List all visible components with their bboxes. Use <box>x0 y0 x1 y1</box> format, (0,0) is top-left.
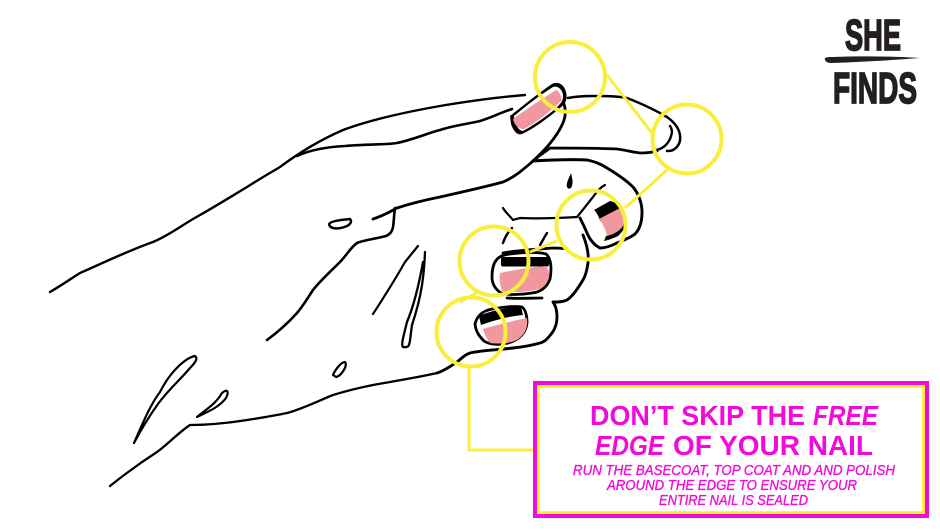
callout heading <box>590 400 879 461</box>
callout body text <box>573 462 895 509</box>
ring finger contour <box>437 235 588 373</box>
lower arm contour <box>110 373 437 486</box>
callout body text: RUN THE BASECOAT, TOP COAT AND AND POLISH <box>573 462 895 479</box>
logo: She Finds <box>825 11 920 113</box>
callout body text: ENTIRE NAIL IS SEALED <box>659 492 808 509</box>
upper arm and index finger contour <box>50 95 525 292</box>
nail: little finger <box>475 307 527 344</box>
callout box <box>535 383 927 516</box>
small wrist marks <box>329 219 351 228</box>
callout body text: AROUND THE EDGE TO ENSURE YOUR <box>606 477 857 494</box>
nail: ring finger <box>492 252 551 294</box>
callout connectors <box>460 75 667 450</box>
middle knuckle contour <box>533 160 642 248</box>
ring finger top edge <box>503 248 566 253</box>
illustration: hand outline <box>50 95 680 486</box>
icon: tear-shaped knuckle mark <box>567 173 573 189</box>
nail: middle finger <box>594 201 626 241</box>
callout heading: DON’T SKIP THE <box>590 400 805 431</box>
wrist bone outline <box>134 356 196 443</box>
finger creases <box>503 228 512 243</box>
thumb nail edge <box>656 126 672 150</box>
callout heading: EDGE <box>595 430 665 461</box>
highlight circles <box>436 42 722 366</box>
thumb top <box>568 96 680 151</box>
callout heading: FREE <box>813 400 879 431</box>
wrist notch and palm line <box>267 208 395 340</box>
callout heading: OF YOUR NAIL <box>673 430 873 461</box>
knuckle ridge <box>503 185 605 220</box>
lower index finger crease <box>297 109 512 156</box>
logo: She Finds: SHE <box>845 11 901 60</box>
index finger underside <box>373 104 565 219</box>
thumb bottom <box>532 148 657 162</box>
palm crease lines <box>373 246 418 314</box>
nail: thumb-side index nail <box>510 83 567 134</box>
